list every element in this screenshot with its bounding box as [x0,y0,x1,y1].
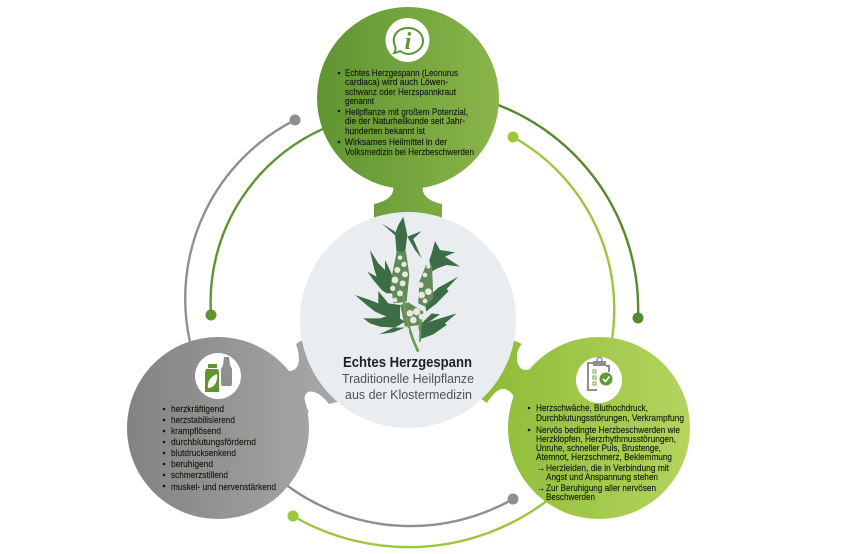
text block: info bullets: Volksmedizin bei Herzbeschwerden [345,147,474,157]
arc: dark green right [490,102,644,324]
arc: grey upper left [185,114,300,342]
text block: info bullets: Echtes Herzgespann (Leonurus [345,68,458,78]
text block: indications list: Beschwerden [546,492,595,502]
arc: light green bottom [288,500,548,547]
text block: info bullets: genannt [345,96,374,106]
text block: effects list [163,404,276,492]
icon: info speech bubble [386,18,430,62]
text block: indications list: Angst und Anspannung stehen [546,472,658,482]
text block: indications list: Zur Beruhigung aller nervösen [546,483,656,493]
subtitle: traditional medicinal plant [342,371,474,402]
icon: clipboard with check [576,357,622,403]
text block: info bullets: schwanz oder Herzspannkraut [345,87,456,97]
subtitle: traditional medicinal plant: aus der Klostermedizin [345,387,472,402]
text block: info bullets: Heilpflanze mit großem Potenzial, [345,107,468,117]
text block: effects list: durchblutungsfördernd [171,437,256,447]
text block: info bullets: die der Naturheilkunde seit Jahr- [345,116,465,126]
text block: indications list: → [537,463,545,473]
arc: dark green upper left [206,124,335,320]
text block: info bullets [338,68,474,157]
panel: centre circle [300,212,516,428]
arc: grey bottom [285,484,518,526]
text block: indications list: Herzschwäche, Bluthochdruck, [536,403,648,413]
text block: indications list: Atemnot, Herzschmerz, Beklemmung [536,452,672,462]
icon: remedy bottles [195,353,241,399]
text block: indications list [528,403,684,502]
text block: indications list: Unruhe, schneller Puls, Brustenge, [536,443,661,453]
panel: info circle [317,7,499,218]
text block: info bullets: cardiaca) wird auch Löwen- [345,77,448,87]
text block: indications list: Nervös bedingte Herzbeschwerden wie [536,425,680,435]
icon: info speech bubble: i [405,29,412,55]
arc: light green right [508,132,614,345]
panel: effects circle [127,335,345,519]
illustration: motherwort plant [355,217,460,352]
text block: indications list: Durchblutungsstörungen, Verkrampfung [536,413,684,423]
text block: effects list: muskel- und nervenstärkend [171,482,276,492]
text block: info bullets: hunderten bekannt ist [345,126,425,136]
text block: effects list: schmerzstillend [171,470,228,480]
text block: indications list: Herzleiden, die in Verbindung mit [546,463,669,473]
text block: effects list: krampflösend [171,426,221,436]
text block: effects list: herzkräftigend [171,404,224,414]
text block: info bullets: Wirksames Heilmittel in der [345,137,447,147]
text block: effects list: blutdrucksenkend [171,448,236,458]
text block: indications list: → [537,483,545,493]
text block: effects list: beruhigend [171,459,213,469]
subtitle: traditional medicinal plant: Traditionelle Heilpflanze [342,371,474,386]
text block: effects list: herzstabilisierend [171,415,235,425]
panel: indications circle [470,332,690,519]
heading: plant name: Echtes Herzgespann [343,355,472,371]
text block: indications list: Herzklopfen, Herzrhythmusstörungen, [536,434,676,444]
